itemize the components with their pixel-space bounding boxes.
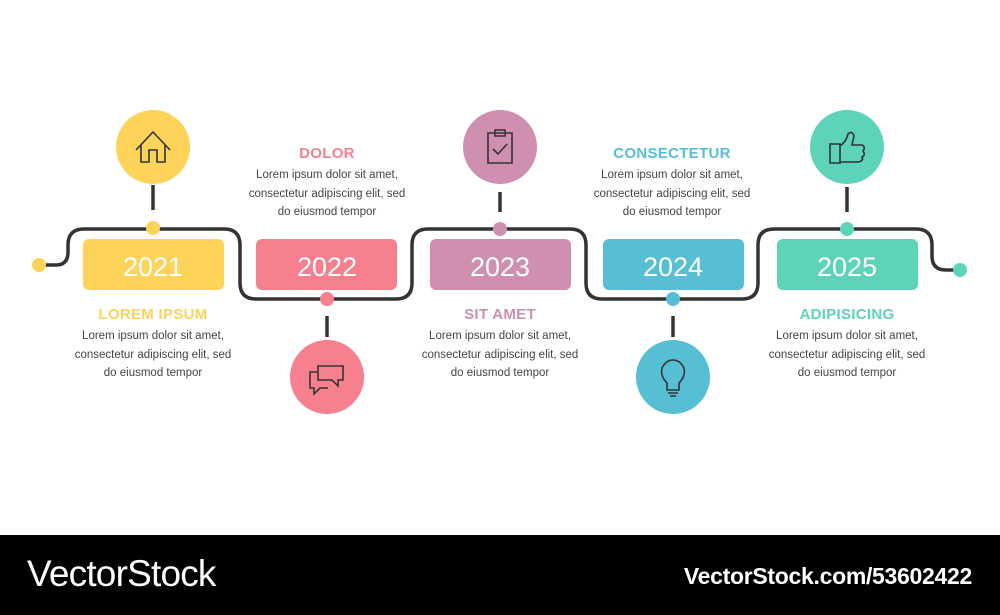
text: 2024: do eiusmod tempor [623, 206, 721, 218]
year boxes [83, 239, 224, 290]
text: 2024: Lorem ipsum dolor sit amet, [601, 169, 743, 181]
text: 2025: ADIPISICING [800, 306, 894, 323]
timeline graphic: 2022 [297, 252, 357, 282]
timeline graphic: 2024 [643, 252, 703, 282]
text: 2025: consectetur adipiscing elit, sed [769, 348, 925, 360]
text: 2022 [249, 145, 405, 218]
text: 2025 [769, 306, 925, 379]
footer bar [0, 535, 1000, 615]
text: 2025: do eiusmod tempor [798, 367, 896, 379]
text: 2023: Lorem ipsum dolor sit amet, [429, 330, 571, 342]
text: 2021: do eiusmod tempor [104, 367, 202, 379]
text: 2025: Lorem ipsum dolor sit amet, [776, 330, 918, 342]
text: 2022: Lorem ipsum dolor sit amet, [256, 169, 398, 181]
text: 2023: SIT AMET [464, 306, 536, 323]
stems and dots [153, 185, 847, 337]
year boxes: 2021 [123, 252, 183, 282]
text: 2023 [422, 306, 578, 379]
text: 2021 [75, 306, 231, 379]
connector path [39, 229, 960, 299]
timeline graphic: 2025 [817, 252, 877, 282]
footer bar: VectorStock [27, 553, 216, 594]
timeline graphic: 2023 [470, 252, 530, 282]
text: 2021: consectetur adipiscing elit, sed [75, 348, 231, 360]
text: 2024: consectetur adipiscing elit, sed [594, 188, 750, 200]
text: 2022: consectetur adipiscing elit, sed [249, 188, 405, 200]
text: 2024: CONSECTETUR [613, 145, 731, 162]
text: 2023: do eiusmod tempor [451, 367, 549, 379]
footer bar: VectorStock.com/53602422 [684, 563, 972, 589]
text: 2022: DOLOR [299, 145, 355, 162]
text: 2021: LOREM IPSUM [98, 306, 208, 323]
text: 2022: do eiusmod tempor [278, 206, 376, 218]
text: 2024 [594, 145, 750, 218]
text: 2023: consectetur adipiscing elit, sed [422, 348, 578, 360]
text: 2021: Lorem ipsum dolor sit amet, [82, 330, 224, 342]
icon circles [116, 110, 190, 184]
